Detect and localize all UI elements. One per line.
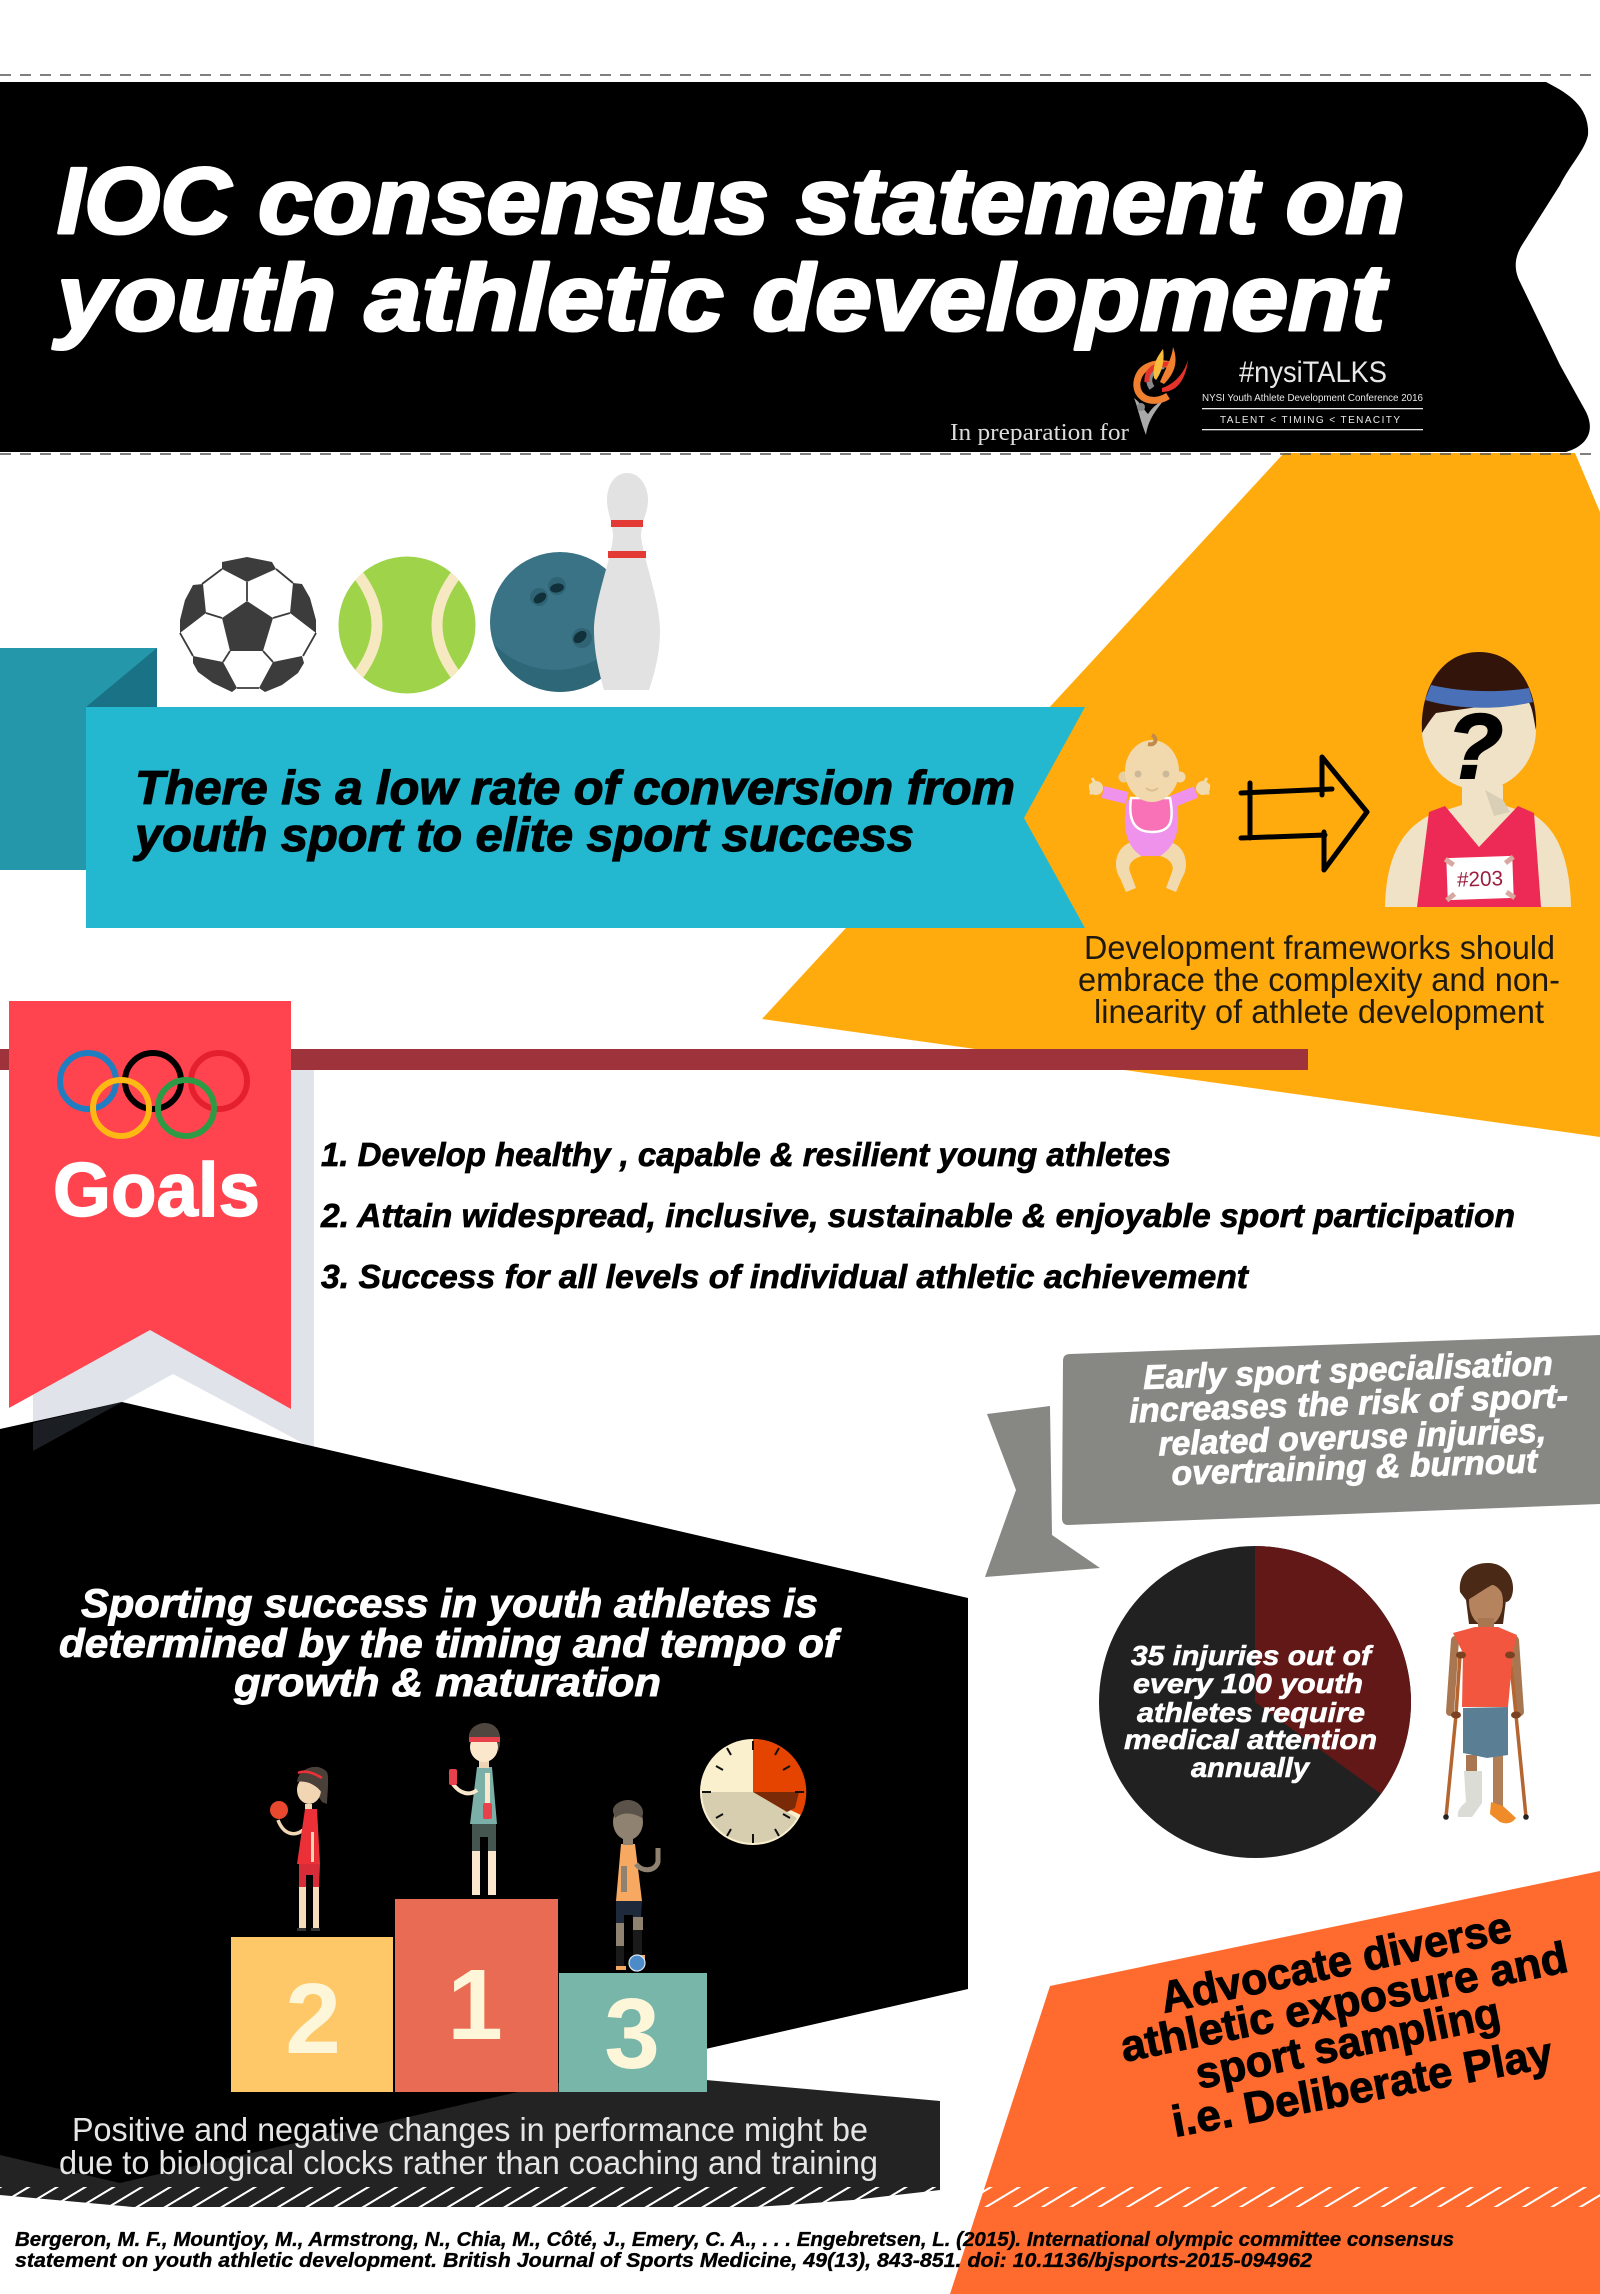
text: early specialisation: increases the risk of sport- <box>1129 1377 1569 1430</box>
race number tag: #203 <box>1457 867 1503 892</box>
icon: tennis ball <box>338 556 476 694</box>
text: injuries statistic <box>1124 1640 1377 1783</box>
icon: mystery athlete: ? <box>1447 696 1503 798</box>
panel: goals banner <box>9 1001 291 1409</box>
text: injuries statistic: 35 injuries out of <box>1131 1640 1374 1671</box>
icon: bowling pin <box>594 473 660 690</box>
text: early specialisation: related overuse injuries, <box>1158 1412 1547 1463</box>
race number tag <box>1445 856 1515 900</box>
text block: goals list <box>320 1136 1515 1295</box>
icon: olympic rings <box>60 1053 247 1136</box>
heading: sporting success <box>59 1582 842 1705</box>
text: early specialisation <box>1127 1344 1571 1494</box>
icon: hand-drawn arrow <box>1241 757 1367 870</box>
chart: podium <box>231 1899 707 2092</box>
heading: sporting success: determined by the timing and tempo of <box>59 1622 842 1666</box>
text: early specialisation: Early sport specialisation <box>1142 1345 1553 1397</box>
panel: dark caption band <box>0 2060 940 2207</box>
icon: athlete first place <box>449 1723 500 1895</box>
icon: soccer ball <box>180 557 316 692</box>
text: advocacy message: Advocate diverse <box>1156 1902 1516 2023</box>
panel: orange advocacy background <box>950 1871 1600 2294</box>
heading: sporting success: growth & maturation <box>233 1661 661 1705</box>
text block: goals list: 2. Attain widespread, inclusive, sustainable & enjoyable sport participation <box>320 1197 1515 1234</box>
text: injuries statistic: annually <box>1191 1752 1310 1783</box>
title <box>53 148 1405 350</box>
icon: injured girl on crutches <box>1443 1563 1529 1823</box>
title: IOC consensus statement on <box>57 148 1405 253</box>
icon: mystery athlete <box>1385 652 1571 907</box>
text: citation: statement on youth athletic development. British Journal of Sports Medicine, 49(13), 843-851. doi: 10.1136/bjsports-2015-094962 <box>15 2250 1312 2272</box>
text: advocacy message: athletic exposure and <box>1116 1933 1572 2072</box>
title: youth athletic development <box>53 245 1389 350</box>
text block: goals list: 1. Develop healthy , capable & resilient young athletes <box>321 1136 1171 1173</box>
icon: stopwatch clock <box>700 1739 806 1845</box>
panel: grey specialisation ribbon <box>985 1335 1600 1577</box>
icon: athlete third place <box>613 1800 658 1971</box>
text: development frameworks <box>1078 929 1560 1030</box>
bar: maroon divider <box>0 1049 1308 1070</box>
text: nysiTALKS lockup: TALENT < TIMING < TENACITY <box>1220 415 1400 426</box>
text: injuries statistic: athletes require <box>1137 1697 1365 1728</box>
text block: goals list: 3. Success for all levels of individual athletic achievement <box>321 1258 1250 1295</box>
text: citation <box>15 2229 1454 2272</box>
text: nysiTALKS lockup: #nysiTALKS <box>1239 356 1387 389</box>
text: advocacy message: sport sampling <box>1191 1988 1505 2099</box>
chart: injury pie <box>1099 1546 1411 1858</box>
text: biological clocks caption: due to biological clocks rather than coaching and training <box>59 2144 878 2181</box>
text: advocacy message <box>1116 1902 1572 2147</box>
heading: low conversion: There is a low rate of conversion from <box>135 761 1015 814</box>
panel: teal ribbon <box>0 648 1085 928</box>
heading: sporting success: Sporting success in youth athletes is <box>81 1582 818 1626</box>
text: development frameworks: linearity of athlete development <box>1094 993 1544 1030</box>
text: injuries statistic: every 100 youth <box>1133 1668 1363 1699</box>
panel: header banner <box>0 82 1590 452</box>
text: citation: Bergeron, M. F., Mountjoy, M., Armstrong, N., Chia, M., Côté, J., Emery, C. A., . . . Engebretsen, L. (2015). International olympic committee consensus <box>15 2229 1454 2251</box>
text: early specialisation: overtraining & burnout <box>1171 1442 1540 1493</box>
heading: goals: Goals <box>53 1148 260 1233</box>
chart: podium: 2 <box>285 1963 341 2075</box>
text: biological clocks caption <box>59 2111 878 2181</box>
text: biological clocks caption: Positive and negative changes in performance might be <box>72 2111 868 2148</box>
icon: athlete second place <box>270 1767 328 1931</box>
panel: black maturation panel <box>0 1402 968 2183</box>
heading: low conversion: youth sport to elite sport success <box>133 808 914 861</box>
heading: low conversion <box>133 761 1015 861</box>
panel: orange development background <box>762 453 1600 1137</box>
text: nysiTALKS lockup <box>1202 356 1423 430</box>
chart: podium: 1 <box>447 1949 503 2061</box>
text: in preparation for: In preparation for <box>950 420 1129 446</box>
icon: NYSI torch logo <box>1134 347 1188 435</box>
text: advocacy message: i.e. Deliberate Play <box>1168 2028 1557 2147</box>
chart: podium: 3 <box>604 1978 660 2090</box>
text: injuries statistic: medical attention <box>1124 1724 1377 1755</box>
text: development frameworks: Development frameworks should <box>1084 929 1555 966</box>
text: development frameworks: embrace the complexity and non- <box>1078 961 1560 998</box>
text: nysiTALKS lockup: NYSI Youth Athlete Development Conference 2016 <box>1202 393 1423 404</box>
icon: bowling ball <box>490 552 606 692</box>
icon: baby <box>1089 735 1210 892</box>
